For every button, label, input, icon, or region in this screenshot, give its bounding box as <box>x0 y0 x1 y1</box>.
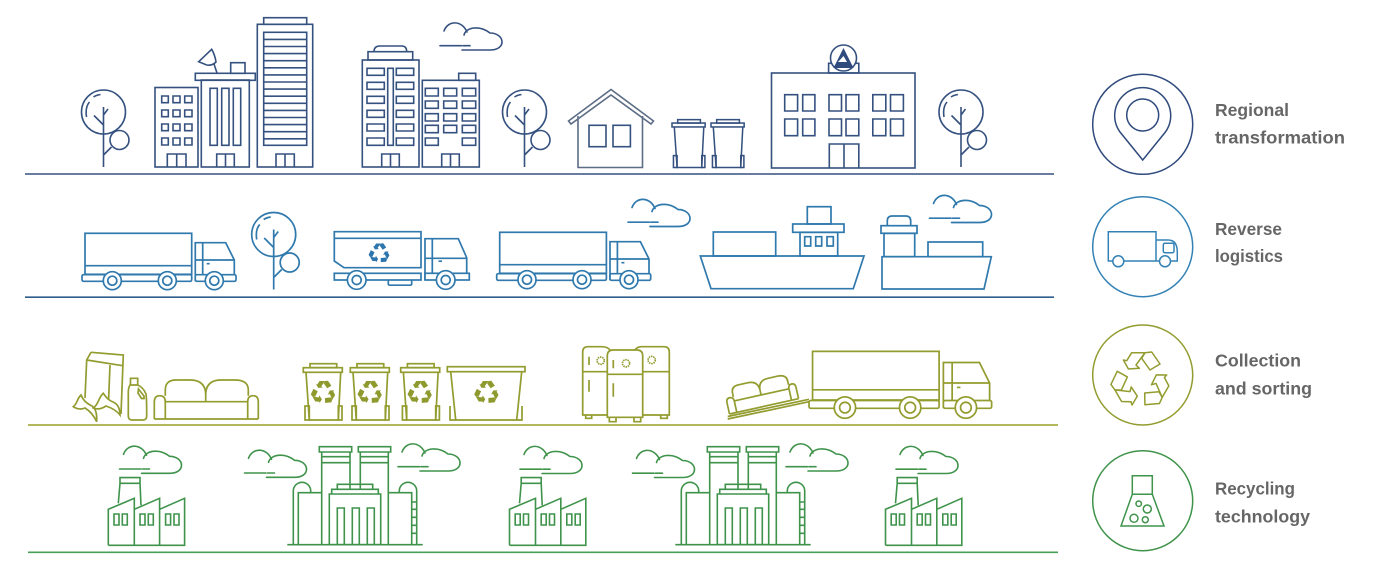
baseline <box>28 551 1058 553</box>
recycling bin <box>350 364 389 420</box>
label: and sorting <box>1215 378 1312 398</box>
waste bin <box>672 120 705 168</box>
building: skyscraper <box>257 18 313 167</box>
tree <box>252 212 299 290</box>
legend: reverse logistics <box>1093 197 1283 297</box>
cloud <box>120 446 182 473</box>
icon: flask <box>1093 451 1193 551</box>
sofa <box>154 380 258 419</box>
sofa on ramp <box>724 373 809 419</box>
truck <box>809 351 992 418</box>
legend: collection and sorting <box>1093 325 1312 425</box>
label: logistics <box>1215 246 1283 266</box>
bottle <box>128 378 147 420</box>
tree <box>502 90 550 167</box>
row: recycling technology <box>28 444 1058 552</box>
factory <box>510 478 586 545</box>
power plant <box>675 447 811 545</box>
cloud <box>896 446 958 474</box>
recycling bin <box>303 364 342 420</box>
label: Regional <box>1215 100 1289 120</box>
power plant <box>287 447 423 545</box>
building: office block <box>155 88 198 167</box>
tree <box>939 90 986 167</box>
tree <box>82 90 129 167</box>
baseline <box>25 173 1054 175</box>
refrigerators <box>583 347 669 422</box>
icon: truck <box>1093 197 1193 297</box>
cloud <box>632 450 694 478</box>
icon: recycling symbol <box>367 243 391 264</box>
cloud <box>520 446 582 474</box>
baseline <box>25 296 1054 298</box>
icon: map pin <box>1093 74 1193 174</box>
paper bag and banana peels <box>73 352 123 422</box>
truck <box>497 232 651 289</box>
row: regional transformation <box>25 18 1054 174</box>
building: roof dish tower <box>195 49 255 167</box>
recycling container <box>447 367 525 420</box>
cloud <box>628 199 690 226</box>
house <box>568 90 654 168</box>
recycling bin <box>401 364 440 420</box>
icon: recycling outline <box>1093 325 1193 425</box>
label: Recycling <box>1215 478 1295 498</box>
recycling truck <box>334 232 469 289</box>
cloud <box>398 444 460 471</box>
job centre building with logo <box>772 45 915 168</box>
building: apartment tower <box>362 46 419 167</box>
building: low-rise <box>422 73 479 167</box>
label: Collection <box>1215 351 1301 371</box>
cargo ship <box>881 216 991 289</box>
cloud <box>244 450 306 477</box>
legend: regional transformation <box>1093 74 1345 174</box>
label: transformation <box>1215 128 1345 148</box>
cargo ship <box>700 207 864 289</box>
factory <box>886 478 962 545</box>
cloud <box>930 195 992 222</box>
cloud <box>440 23 502 50</box>
row: reverse logistics <box>25 195 1054 297</box>
label: Reverse <box>1215 219 1282 239</box>
waste bin <box>711 120 744 168</box>
factory <box>108 478 185 545</box>
row: collection and sorting <box>28 347 1058 425</box>
legend: recycling technology <box>1093 451 1310 551</box>
label: technology <box>1215 506 1310 526</box>
cloud <box>786 444 848 471</box>
truck <box>82 233 236 290</box>
baseline <box>28 424 1058 426</box>
